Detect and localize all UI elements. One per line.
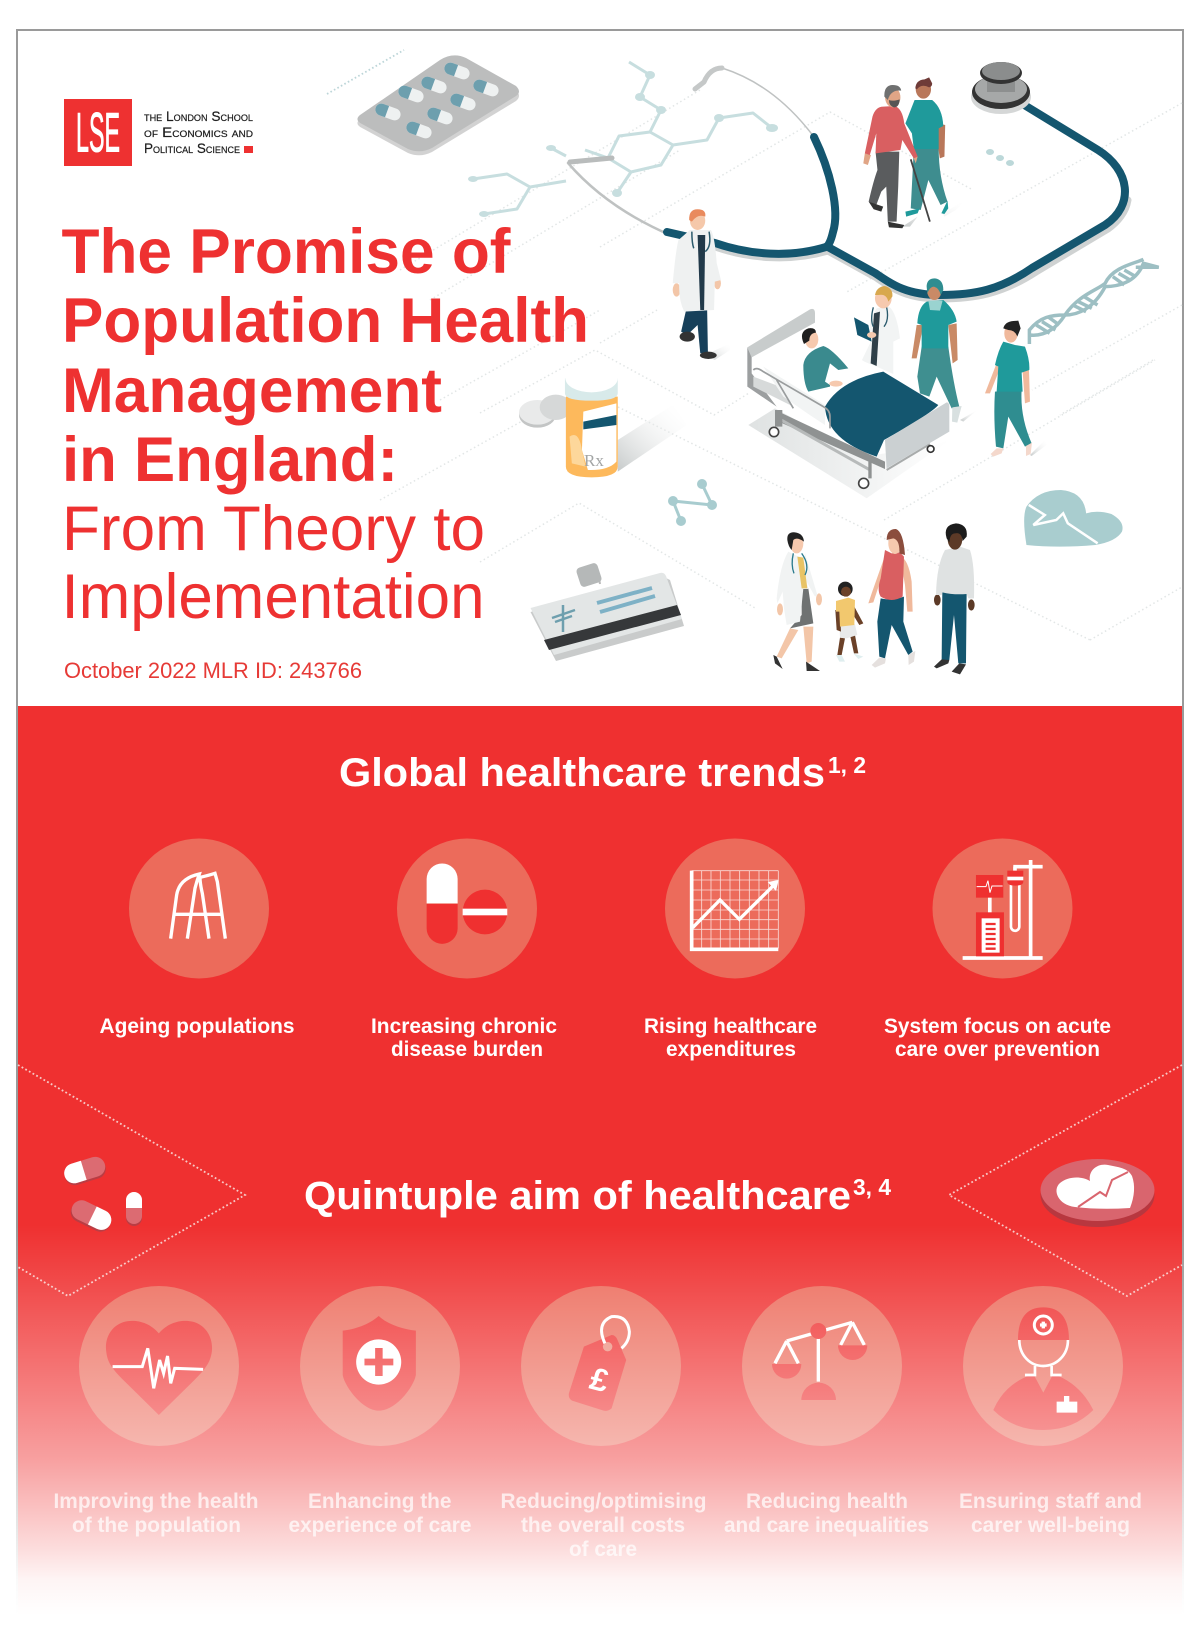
icon: molecule [468,62,778,217]
title: From Theory to [62,494,485,564]
footboard [885,402,949,468]
icon: balance scales [742,1286,902,1446]
figure: man in grey sweater [934,523,975,674]
icon: broken heart badge [1040,1159,1154,1227]
blanket [825,372,938,457]
headboard [747,309,815,357]
label: System focus on acute care over prevention: System focus on acute [884,1015,1111,1038]
label: Reducing health and care inequalities [724,1490,929,1537]
figure: female doctor [773,532,822,671]
label: Ensuring staff and carer well-being [959,1490,1142,1537]
figure: walking doctor [673,209,730,360]
title: The Promise of [62,217,512,287]
title: Management [62,356,442,426]
label: Enhancing the experience of care: experience of care [288,1514,472,1537]
figure: hospital bed with patient and staff [747,278,1047,498]
side rail [753,369,830,428]
label: Improving the health of the population: of the population [72,1514,241,1537]
icon: stethoscope [568,62,1128,299]
label: Improving the health of the population [54,1490,258,1537]
label: Reducing/optimising the overall costs of care: of care [569,1538,637,1561]
LSE logo: LSE [76,100,120,164]
label: Increasing chronic disease burden [371,1015,557,1061]
dotted diamond frames [18,1065,1182,1296]
label: Ageing populations: Ageing populations [100,1015,294,1038]
icon: broken heart [1024,490,1123,547]
white fade overlay at bottom of page [0,1225,1200,1650]
LSE logo: Political Science [144,141,240,156]
label: System focus on acute care over prevention [884,1015,1111,1061]
label: Rising healthcare expenditures [644,1015,817,1061]
icon: pill blister pack [327,50,519,155]
icon: small molecule [670,480,716,524]
label: Reducing/optimising the overall costs of care [500,1490,706,1561]
label: Ensuring staff and carer well-being: Ensuring staff and [959,1490,1142,1513]
figure: man with cane and nurse [863,77,965,228]
heading: Quintuple aim of healthcare: Quintuple aim of healthcare [304,1174,851,1218]
label: Improving the health of the population: Improving the health [54,1490,258,1513]
label: Increasing chronic disease burden: disease burden [391,1038,543,1061]
patient [803,346,848,392]
LSE logo: the London School [144,109,253,124]
figure: doctor behind bed [854,286,900,374]
label: Rising healthcare expenditures: Rising healthcare [644,1015,817,1038]
icon: price tag with pound sign: £ [586,1360,613,1399]
label: Enhancing the experience of care [288,1490,472,1537]
label: Reducing health and care inequalities: Reducing health [746,1490,908,1513]
title [62,217,589,632]
date and ID: October 2022 MLR ID: 243766 [64,658,362,683]
figure: family group [773,523,975,674]
label: System focus on acute care over prevention: care over prevention [895,1038,1100,1061]
title: Implementation [62,562,484,632]
icon: IV stand and monitor [932,838,1072,978]
icon: DNA helix [1029,259,1159,344]
mattress [760,323,878,425]
heading: Global healthcare trends: Global healthcare trends [339,751,825,795]
title: in England: [62,425,398,495]
icon: walking frame [129,838,269,978]
label: Enhancing the experience of care: Enhancing the [308,1490,452,1513]
icon: pill bottle with tablets [519,364,687,477]
icon: small pills [62,1154,142,1235]
figure: pregnant woman [868,529,915,668]
icon: ID card [530,562,684,661]
label: Ensuring staff and carer well-being: carer well-being [971,1514,1130,1537]
Rx mark: Rx [584,451,604,470]
frame [775,410,885,469]
icon: heart with pulse [79,1286,239,1446]
label: Reducing/optimising the overall costs of care: the overall costs [521,1514,685,1537]
background isometric dotted grid [380,90,1182,640]
panel: red background [18,706,1182,1650]
figure: standing nurse [985,321,1032,457]
icon: medical staff member [963,1286,1123,1446]
LSE logo [64,99,254,166]
LSE logo: of Economics and [144,125,254,140]
icon: price tag with pound sign [521,1286,681,1446]
title: Population Health [62,286,589,356]
icon: capsule and tablet [397,838,537,978]
label: Rising healthcare expenditures: expenditures [666,1038,796,1061]
icon: rising chart [665,838,805,978]
label: Reducing health and care inequalities: and care inequalities [724,1514,929,1537]
heading: Quintuple aim of healthcare: 3, 4 [853,1174,891,1200]
icon: small dots [986,149,1014,166]
label: Increasing chronic disease burden: Increasing chronic [371,1015,557,1038]
figure: standing surgeon [912,278,962,423]
label: Reducing/optimising the overall costs of care: Reducing/optimising [500,1490,706,1513]
icon: shield with cross [300,1286,460,1446]
figure: child [835,582,863,662]
heading: Global healthcare trends: 1, 2 [828,752,866,778]
